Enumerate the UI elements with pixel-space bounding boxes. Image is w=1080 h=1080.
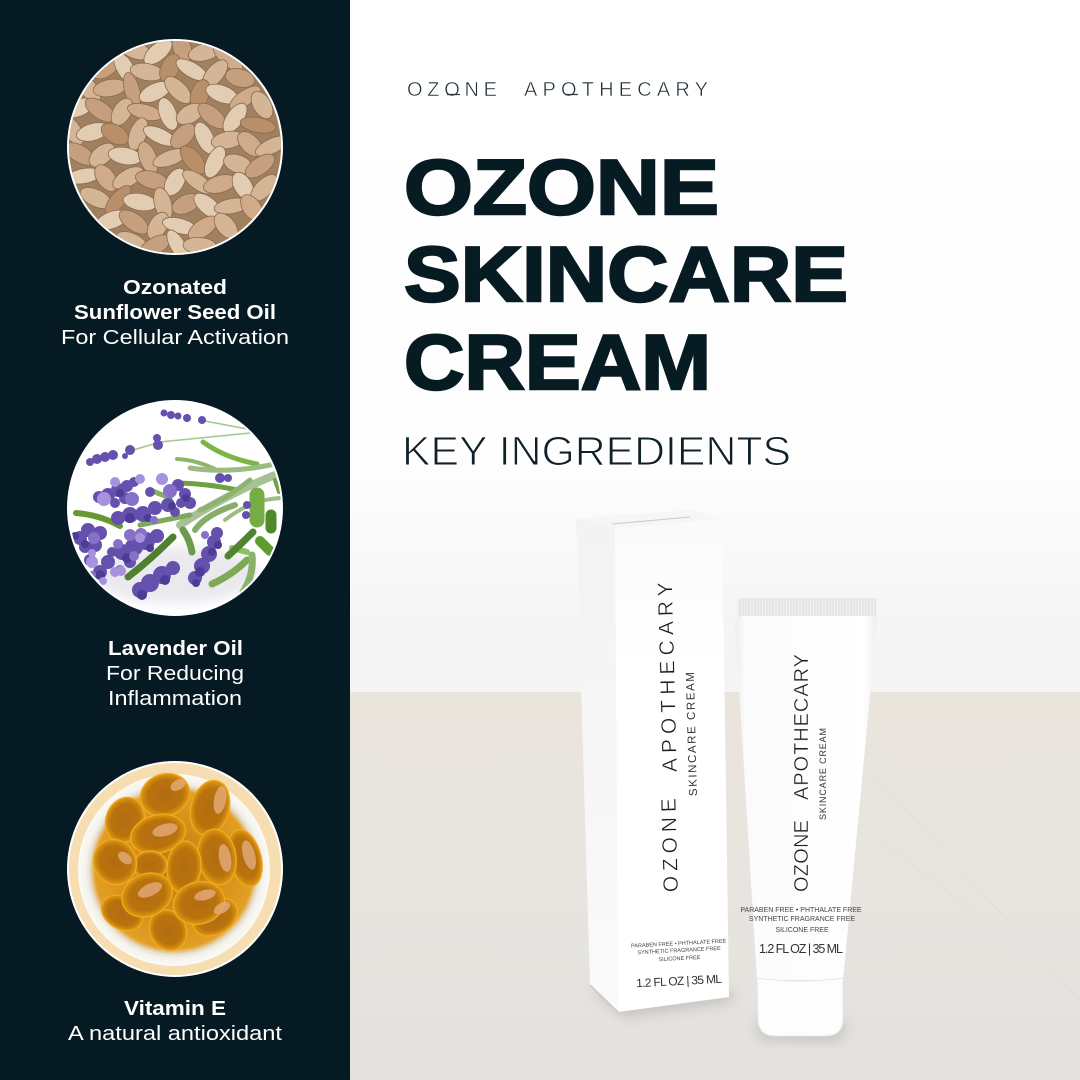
title: [404, 143, 848, 406]
tube product name: SKINCARE CREAM: [818, 728, 828, 820]
ingredient: sunflower seed oil photo: [67, 39, 283, 255]
tube printed brand: APOTHECARY: [791, 654, 813, 800]
tube printed brand: OZONE: [791, 820, 813, 892]
ingredient text: lavender oil: Inflammation: [108, 688, 242, 710]
box small print: PARABEN FREE • PHTHALATE FREE: [631, 939, 727, 950]
brand logo: APOTHECARY: [524, 79, 708, 101]
box size: 1.2 FL OZ | 35 ML: [636, 972, 723, 990]
leaves: [76, 442, 280, 592]
ingredient text: sunflower seed oil: For Cellular Activation: [61, 327, 289, 349]
box small print: SYNTHETIC FRAGRANCE FREE: [637, 946, 721, 956]
title: CREAM: [404, 318, 711, 406]
tube cap ridge: [737, 598, 877, 617]
top sprigs: [86, 410, 250, 466]
ingredient text: vitamin E: A natural antioxidant: [68, 1023, 283, 1045]
title: SKINCARE: [404, 230, 848, 318]
ingredient: lavender photo: [67, 400, 283, 616]
box small print: SILICONE FREE: [658, 955, 701, 963]
background: wall and floor: [350, 0, 1080, 1080]
ingredient text: sunflower seed oil: [61, 277, 289, 349]
tube printed brand: [791, 654, 813, 892]
ingredient text: vitamin E: Vitamin E: [124, 998, 226, 1020]
box side and front faces: [576, 510, 729, 1012]
tube size: 1.2 FL OZ | 35 ML: [759, 942, 843, 956]
box printed brand: APOTHECARY: [654, 582, 682, 772]
box small print: [631, 939, 728, 965]
ingredient text: lavender oil: [106, 638, 244, 710]
product box: [576, 510, 729, 1012]
tube foot: [757, 978, 843, 1036]
ingredient text: vitamin E: [68, 998, 283, 1045]
brand logo: OZONE: [407, 79, 497, 101]
box product name: SKINCARE CREAM: [685, 672, 700, 796]
ingredient text: lavender oil: Lavender Oil: [108, 638, 243, 660]
title: OZONE: [404, 143, 719, 231]
panel: dark ingredients sidebar: [0, 0, 350, 1080]
ingredient text: sunflower seed oil: Sunflower Seed Oil: [74, 302, 276, 324]
tube small print: SILICONE FREE: [775, 927, 829, 934]
tube body: [735, 616, 877, 980]
subtitle: KEY INGREDIENTS: [402, 428, 791, 474]
ingredient text: lavender oil: For Reducing: [106, 663, 244, 685]
tube small print: [740, 907, 862, 934]
ingredient text: sunflower seed oil: Ozonated: [123, 277, 227, 299]
ingredient: vitamin E capsules photo: [67, 761, 283, 977]
flower clusters: [71, 473, 251, 600]
box printed brand: [654, 582, 683, 892]
tube small print: PARABEN FREE • PHTHALATE FREE: [740, 907, 862, 914]
box printed brand: OZONE: [658, 798, 683, 892]
product tube: [735, 598, 877, 1036]
tube small print: SYNTHETIC FRAGRANCE FREE: [749, 916, 855, 923]
brand logo: [407, 79, 708, 101]
product shadow: [590, 990, 848, 1042]
